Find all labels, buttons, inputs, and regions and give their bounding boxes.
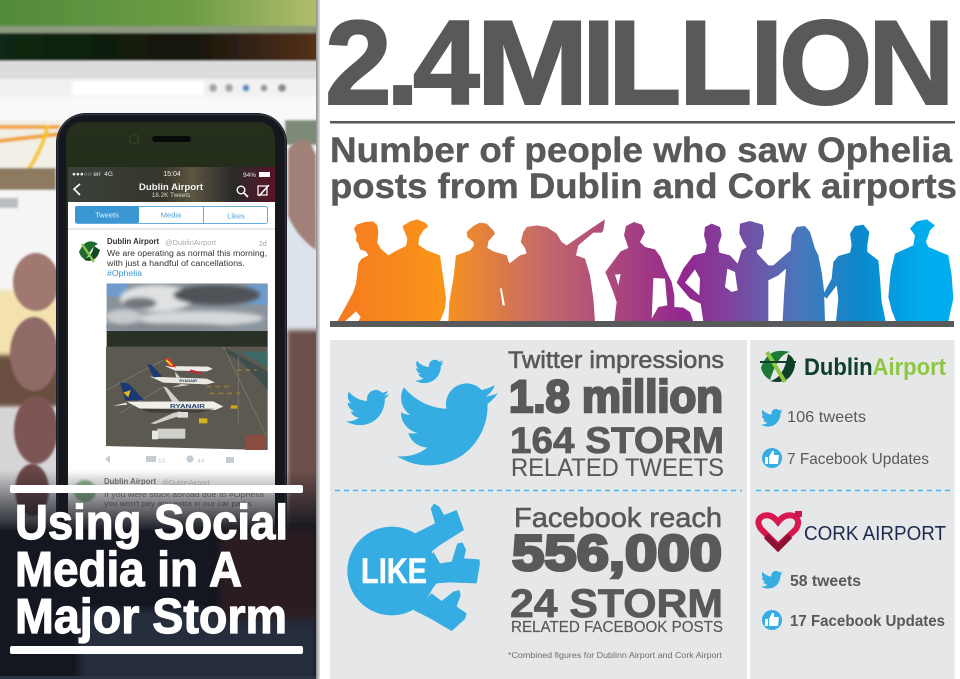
dark blur overlay at the foot of the photo (0, 470, 316, 530)
icon: like badge with thumbs: LIKE (361, 552, 427, 591)
tabs: Tweets (95, 210, 119, 220)
icon: large twitter bird (397, 383, 498, 465)
plane: Ryanair large: RYANAIR (170, 404, 205, 410)
headline: 2.4 million (325, 0, 955, 130)
tweet avatar (79, 241, 100, 262)
second tweet, faded: you won't pay any extra in our car parks (104, 499, 252, 508)
phone (56, 113, 287, 530)
tweet text: We are operating as normal this morning, (107, 249, 267, 258)
twitter stats text (508, 347, 724, 482)
plane: Ryanair small: RYANAIR (179, 378, 197, 383)
facebook stats text (508, 502, 723, 660)
Cork facebook row: 17 Facebook Updates (790, 613, 945, 630)
title: Using Social Media in A Major Storm: Major Storm (15, 590, 287, 644)
title: Using Social Media in A Major Storm: Using Social (15, 496, 288, 550)
facebook stats text: 24 STORM (510, 582, 723, 626)
logo: Cork Airport (758, 511, 946, 548)
logo: Dublin Airport: DublinAirport (804, 354, 946, 381)
panel: phone photograph (0, 0, 326, 679)
phone status and navigation bar (68, 167, 275, 202)
tweet text: 2d (259, 241, 267, 248)
crowd baseline bar (330, 321, 954, 327)
twitter stats text: 1.8 million (509, 371, 723, 422)
headline: 2.4 million: M (476, 0, 589, 130)
twitter stats text: RELATED TWEETS (511, 454, 724, 482)
phone status and navigation bar: 94% (243, 172, 256, 179)
Dublin facebook row: 7 Facebook Updates (787, 451, 929, 468)
subheading: posts from Dublin and Cork airports (330, 166, 957, 206)
tweet text (106, 237, 267, 278)
headline: 2.4 million: ILLION (582, 0, 955, 130)
plane: Iberia (165, 358, 213, 373)
tweet text: #Ophelia (107, 269, 143, 278)
subheading (330, 130, 957, 206)
second tweet, faded (74, 477, 265, 508)
phone status and navigation bar: Dublin Airport (139, 182, 204, 193)
title: Using Social Media in A Major Storm: Media in A (15, 543, 242, 597)
icon: small twitter bird top (415, 360, 444, 383)
title: Using Social Media in A Major Storm (10, 485, 303, 654)
second tweet, faded: If you were stuck abroad due to #Ophelia (104, 490, 265, 499)
icon: like badge with thumbs (347, 504, 480, 631)
photo edge shadow (316, 0, 320, 679)
facebook stats text: Facebook reach (514, 502, 722, 533)
facebook stats text: 556,000 (512, 525, 722, 581)
second tweet, faded: @DublinAirport (162, 480, 210, 487)
plane: Ryanair large (113, 382, 223, 424)
phone status and navigation bar: 15:04 (163, 171, 181, 178)
tweet photo: airport apron (100, 283, 268, 450)
panel: combined stats (330, 340, 747, 679)
twitter stats text: Twitter impressions (508, 347, 724, 374)
dark keyboard area (0, 530, 316, 679)
facebook stats text: RELATED FACEBOOK POSTS (511, 619, 723, 636)
panel: airport stats (750, 340, 954, 679)
tabs: Likes (227, 212, 245, 220)
headline: 2.4 million: 2.4 (325, 0, 480, 130)
dashed divider (335, 490, 950, 492)
Cork tweets row: 58 tweets (790, 573, 861, 590)
tweet action icons: 10 (158, 458, 166, 465)
fingers holding the phone (10, 140, 316, 516)
subheading: Number of people who saw Ophelia (330, 130, 952, 170)
tweet action icons: 44 (197, 458, 205, 465)
icon: small twitter bird left (346, 390, 389, 425)
white page background beside the photo (316, 0, 332, 679)
tabs (75, 206, 268, 224)
tweet text: @DublinAirport (165, 240, 216, 247)
Dublin tweets row: 106 tweets (787, 409, 866, 426)
tweet text: Dublin Airport (107, 237, 160, 246)
phone status and navigation bar: ●●●○○ eir 4G (72, 171, 113, 178)
logo: Dublin Airport (760, 351, 946, 382)
tabs: Media (161, 210, 182, 220)
logo: Cork Airport: CORK AIRPORT (804, 523, 946, 545)
twitter stats text: 164 STORM (510, 419, 724, 461)
tweet action icons (105, 455, 234, 465)
facebook stats text: *Combined figures for Dublinn Airport and Cork Airport (508, 650, 723, 660)
Cork tweets row (761, 571, 861, 590)
truck (152, 429, 185, 439)
Cork facebook row (762, 610, 945, 630)
phone status and navigation bar: 18.2K Tweets (152, 192, 190, 199)
plane: Ryanair small (147, 364, 215, 387)
second tweet, faded: Dublin Airport (104, 477, 157, 486)
phone tweet screen (68, 202, 275, 542)
crowd silhouettes with gradient (337, 219, 953, 321)
tweet text: with just a handful of cancellations. (106, 259, 245, 268)
